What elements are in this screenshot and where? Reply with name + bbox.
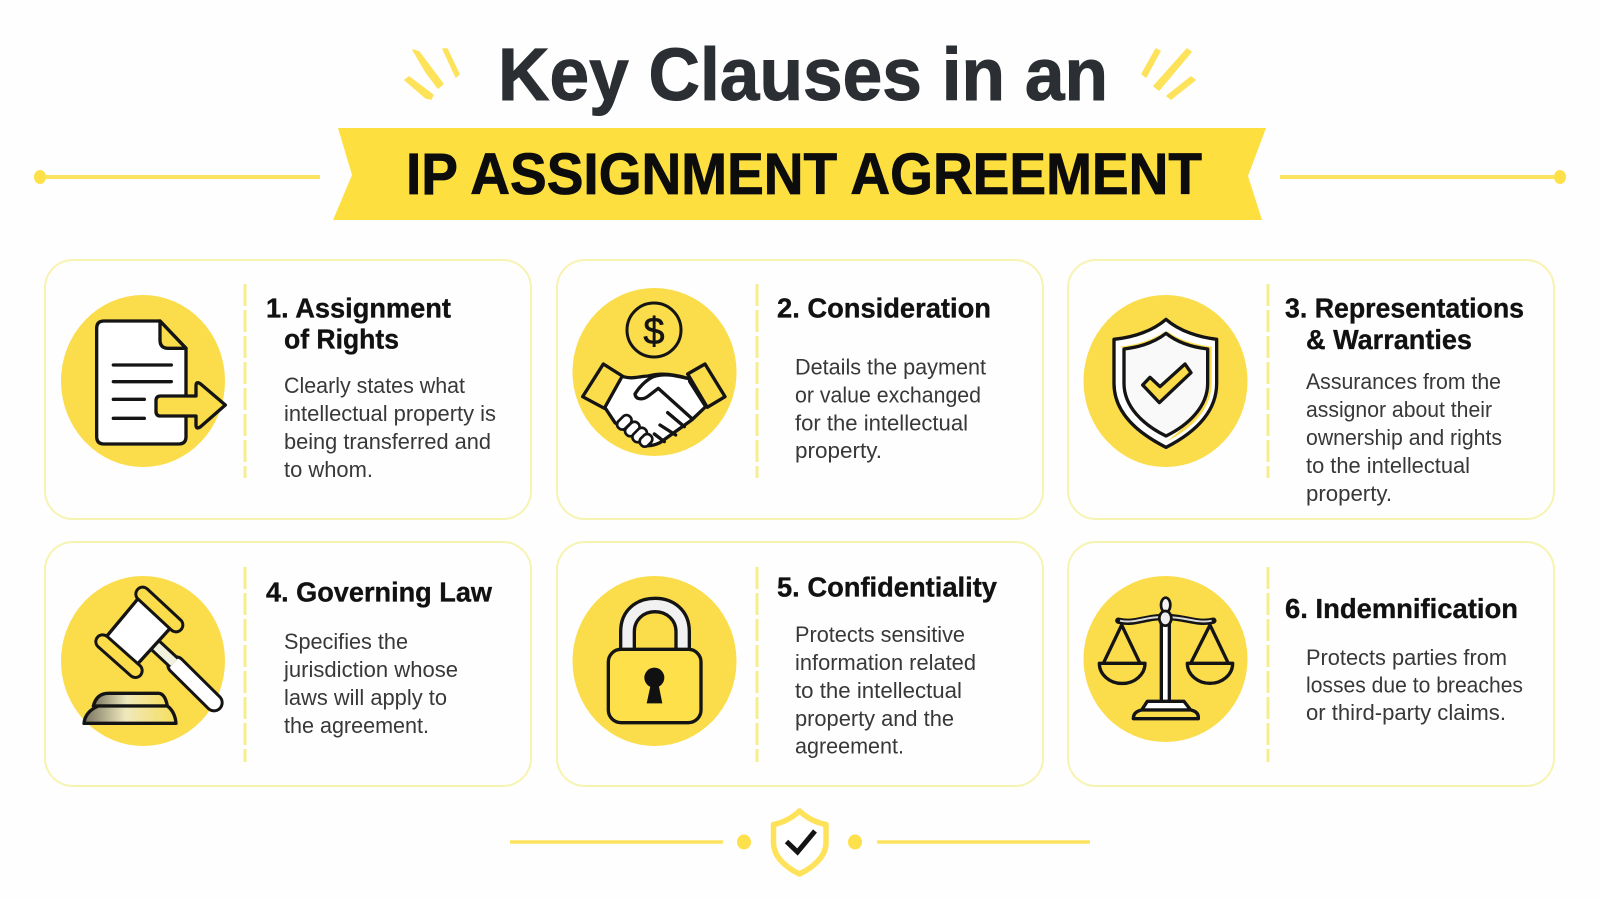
- body text: [1306, 369, 1502, 506]
- body text: [795, 622, 976, 758]
- header: [34, 33, 1566, 220]
- heading: 5. Confidentiality: [777, 572, 997, 602]
- body text: Protects parties from: [1306, 645, 1507, 670]
- icon: scales of justice: [1084, 576, 1248, 742]
- body text: to the intellectual: [1306, 453, 1470, 478]
- subtitle: IP ASSIGNMENT AGREEMENT: [406, 142, 1202, 207]
- icon: gavel: [61, 576, 225, 746]
- body text: being transferred and: [284, 429, 491, 454]
- heading: 4. Governing Law: [266, 576, 492, 608]
- icon: handshake and coin: $: [643, 311, 665, 353]
- body text: or third-party claims.: [1306, 700, 1506, 725]
- icon: padlock: [572, 576, 736, 746]
- body text: Assurances from the: [1306, 369, 1501, 394]
- panel: 2 Consideration: [557, 260, 1043, 519]
- heading: [266, 292, 451, 354]
- body text: agreement.: [795, 734, 904, 758]
- body text: [1306, 645, 1523, 725]
- body text: [795, 354, 986, 463]
- body text: Details the payment: [795, 354, 986, 380]
- panel: 6 Indemnification: [1068, 542, 1554, 786]
- heading: 6. Indemnification: [1285, 593, 1518, 624]
- body text: ownership and rights: [1306, 425, 1502, 450]
- icon: footer shield with check: [774, 811, 826, 874]
- icon: handshake and coin: [572, 288, 736, 456]
- heading: & Warranties: [1306, 324, 1472, 355]
- heading: 1. Assignment: [266, 292, 451, 324]
- icon: document with arrow: [61, 295, 225, 467]
- body text: [284, 373, 496, 482]
- body text: laws will apply to: [284, 685, 447, 710]
- icon: left sparkle: [405, 49, 459, 99]
- footer ornament: [510, 811, 1090, 874]
- body text: or value exchanged: [795, 382, 981, 408]
- banner ribbon: [333, 128, 1266, 220]
- left ornament line: [34, 170, 320, 184]
- body text: Protects sensitive: [795, 622, 965, 647]
- right ornament line: [1280, 170, 1566, 184]
- panel: 3 Representations & Warranties: [1068, 260, 1554, 519]
- body text: intellectual property is: [284, 401, 496, 426]
- icon: right sparkle: [1142, 49, 1195, 99]
- heading: [1285, 292, 1524, 355]
- body text: [283, 629, 458, 738]
- body text: assignor about their: [1306, 397, 1492, 422]
- body text: to the intellectual: [795, 678, 962, 703]
- heading: 2. Consideration: [777, 292, 991, 324]
- body text: jurisdiction whose: [283, 657, 458, 682]
- heading: of Rights: [284, 324, 399, 354]
- body text: losses due to breaches: [1306, 672, 1523, 698]
- body text: Specifies the: [284, 629, 408, 654]
- panel: 1 Assignment of Rights: [45, 260, 531, 519]
- body text: Clearly states what: [284, 373, 465, 398]
- body text: property.: [1306, 481, 1392, 506]
- body text: for the intellectual: [795, 410, 968, 436]
- heading: 3. Representations: [1285, 292, 1524, 324]
- panel: 4 Governing Law: [45, 542, 531, 786]
- body text: to whom.: [284, 457, 373, 482]
- title: Key Clauses in an: [498, 33, 1108, 116]
- icon: shield with check: [1084, 295, 1248, 467]
- body text: property and the: [795, 706, 954, 731]
- body text: information related: [795, 650, 976, 675]
- body text: property.: [795, 438, 882, 463]
- panel: 5 Confidentiality: [557, 542, 1043, 786]
- body text: the agreement.: [284, 713, 429, 738]
